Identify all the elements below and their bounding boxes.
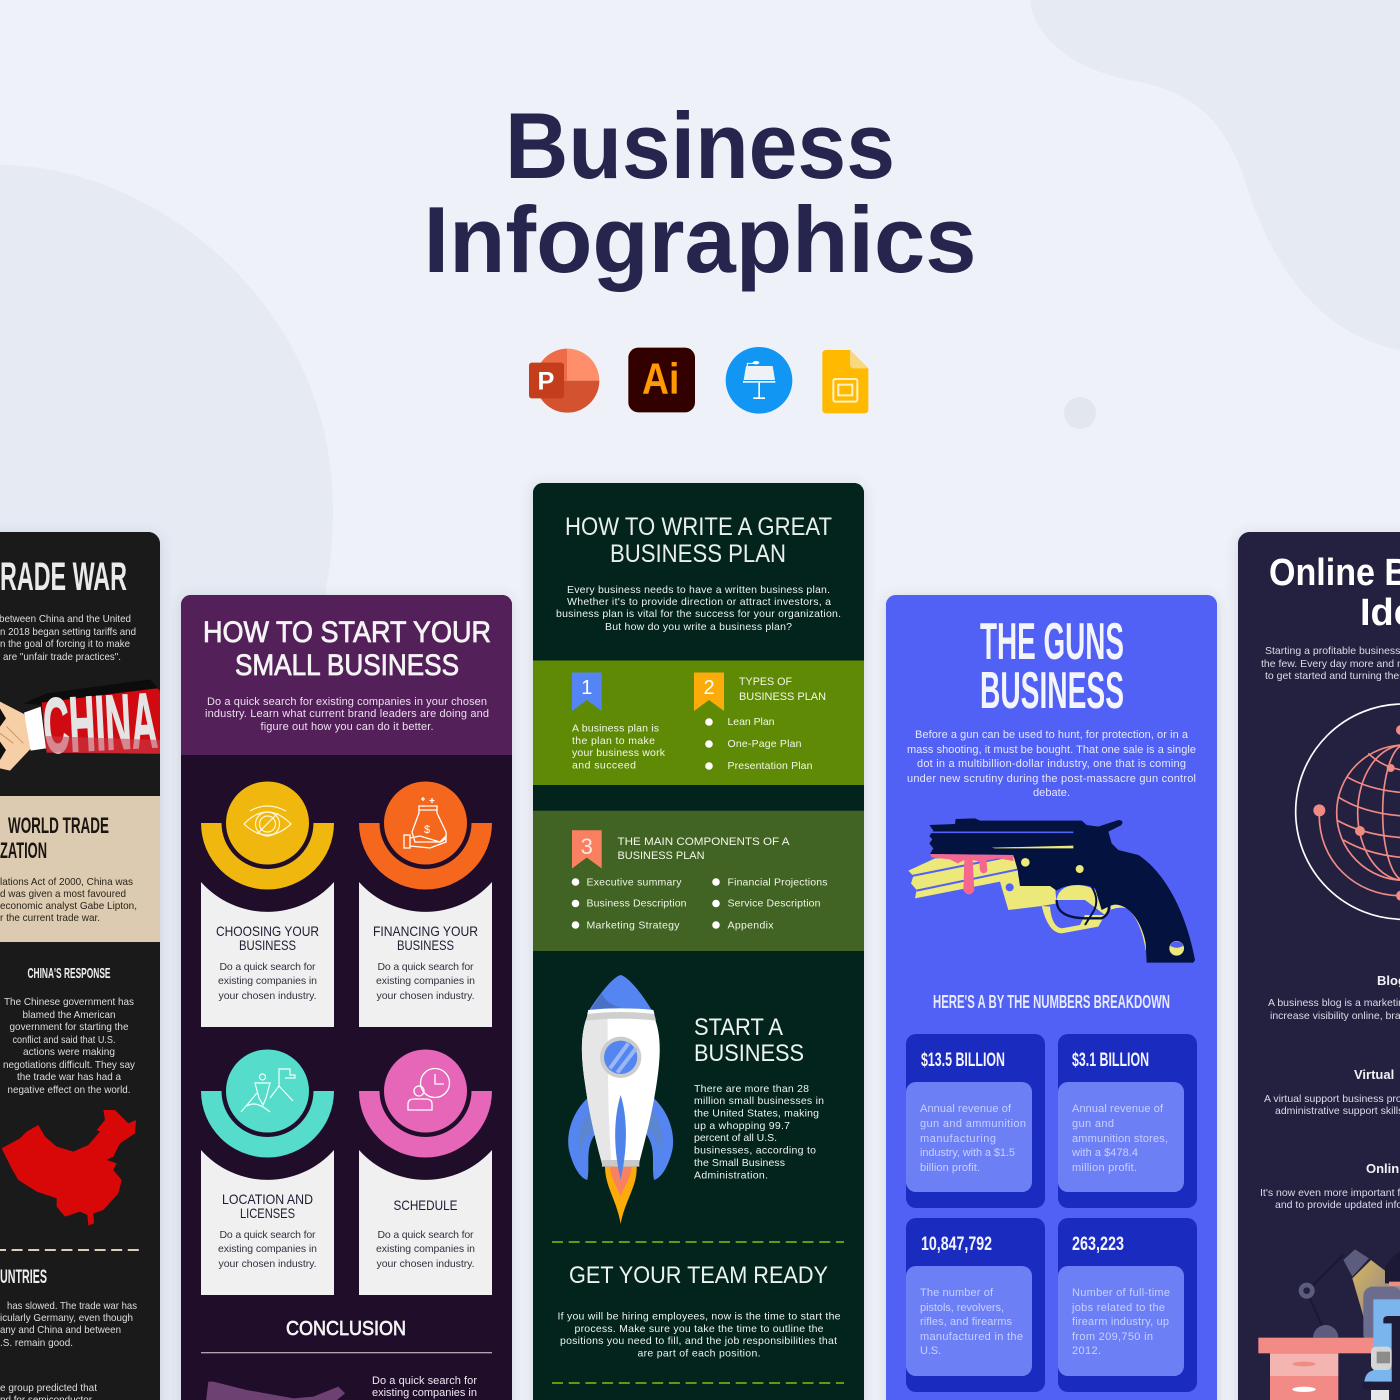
heading: HOW TO WRITE A GREAT [565,513,832,541]
text: start a business: million small businesses in [694,1095,824,1107]
stat: 263,223: firearm industry, up [1072,1316,1169,1328]
text: get your team ready: If you will be hiring employees, now is the time to start the [558,1310,841,1322]
heading: numbers breakdown: HERE'S A BY THE NUMBERS BREAKDOWN [933,992,1170,1012]
panel: world trade organization: d was given a most favoured [0,888,126,900]
card shadows [0,483,1400,1400]
heading [566,517,832,562]
title: Business [505,93,895,198]
text: start a business: the United States, making [694,1108,819,1120]
intro text: Before a gun can be used to hunt, for protection, or in a [915,729,1189,741]
text: get your team ready: process. Make sure you take the time to outline the [574,1323,824,1335]
intro text: mass shooting, it must be bought. That one sale is a single [907,744,1196,756]
text: get your team ready: positions you need to fill, and the job responsibilities that [560,1335,837,1347]
badge 2 [694,672,724,711]
intro text: But how do you write a business plan? [605,621,792,633]
step: schedule: existing companies in [376,1243,475,1255]
heading: start a business: START A [694,1014,783,1041]
step: choosing your business [201,782,334,1027]
panel: world trade organization: WORLD TRADE [8,813,109,838]
text: China's response: negative effect on the world. [8,1084,130,1096]
stat: 10,847,792: The number of [920,1287,994,1299]
illustration: rocket [568,975,673,1224]
icon: PowerPoint: P [538,367,555,395]
stat: 13.5 billion: $13.5 BILLION [921,1050,1005,1071]
panel: steps one and two: Presentation Plan [728,760,813,772]
icon: person and clock [408,1068,450,1110]
heading [1269,552,1400,634]
header band: figure out how you can do it better. [260,721,434,733]
panel: step three [533,811,864,951]
icon: Keynote [726,347,792,414]
header band: SMALL BUSINESS [235,649,459,682]
panel: steps one and two [533,660,864,785]
software icons row [529,347,868,414]
heading: get your team ready: GET YOUR TEAM READY [569,1262,828,1289]
intro text [907,729,1196,799]
header band: Do a quick search for existing companies in your chosen [207,696,487,708]
stat: 3.1 billion: ammunition stores, [1072,1133,1168,1145]
panel: world trade organization: r the current trade war. [0,912,100,924]
stat: 13.5 billion: billion profit. [920,1162,980,1174]
stat: 263,223: from 209,750 in [1072,1331,1153,1343]
panel: steps one and two: One-Page Plan [728,738,802,750]
panel: world trade organization [0,796,160,942]
intro text [0,613,136,663]
heading: China's response: CHINA'S RESPONSE [28,965,110,982]
intro text: Whether it's to provide direction or attract investors, a [567,596,831,608]
title [424,93,976,292]
stat: 263,223: Number of full-time [1072,1287,1170,1299]
intro text [1261,645,1400,682]
text: conclusion: Do a quick search for [372,1375,477,1387]
panel: steps one and two: and succeed [572,760,636,772]
stat: 3.1 billion: with a $478.4 [1071,1147,1138,1159]
section: virtual support: administrative support skills [1275,1105,1400,1117]
panel: online business ideas [1238,532,1400,1400]
text: countries: has slowed. The trade war has [7,1300,137,1312]
step: financing your business: FINANCING YOUR [373,923,478,939]
icon: Illustrator: Ai [642,354,679,403]
step: financing your business: Do a quick search for [378,961,474,973]
map: United States [205,1382,345,1400]
text: conclusion [372,1375,477,1399]
panel: step three: THE MAIN COMPONENTS OF A [618,836,790,848]
panel: step three: Service Description [728,898,821,910]
step: choosing your business: Do a quick search for [220,961,316,973]
text: China's response: actions were making [23,1046,115,1058]
stat: 10,847,792: U.S. [920,1345,941,1357]
icon: money bag in hand [404,797,446,848]
text: China's response: negotiations difficult. They say [3,1059,136,1071]
intro text: between China and the United [0,613,131,625]
text: start a business: businesses, according to [694,1144,816,1156]
section: online [1260,1161,1400,1211]
step: schedule: your chosen industry. [376,1258,474,1270]
intro text: Every business needs to have a written business plan. [567,584,830,596]
panel: step three: Appendix [728,920,774,932]
intro text: dot in a multibillion-dollar industry, one that is coming [917,758,1186,770]
step: financing your business [359,782,492,1027]
intro text: under new scrutiny during the post-massacre gun control [907,773,1196,785]
step: location and licenses: LICENSES [240,1205,295,1221]
text: conclusion: existing companies in [372,1387,477,1399]
text: start a business: the Small Business [694,1157,785,1169]
panel: steps one and two: TYPES OF [739,676,792,688]
badge 3 [572,830,602,868]
section: virtual support [1264,1067,1400,1117]
icon: summit with flag [241,1069,295,1112]
header band: industry. Learn what current brand leaders are doing and [205,708,489,720]
stat: 3.1 billion: gun and [1072,1118,1114,1130]
heading [980,622,1123,708]
panel: step three: Marketing Strategy [586,920,680,932]
step: choosing your business: existing companies in [218,975,317,987]
section: blog [1268,973,1400,1022]
icon: PowerPoint [529,349,599,413]
heading: THE GUNS [980,613,1124,671]
panel: steps one and two: the plan to make [572,735,655,747]
text: China's response: the trade war has had a [17,1071,121,1083]
step: financing your business: existing companies in [376,975,475,987]
panel: step three: Financial Projections [728,876,828,888]
illustration: handshake and China sleeve [0,676,160,771]
heading: BUSINESS [980,662,1124,720]
stat: 10,847,792: rifles, and firearms [920,1316,1012,1328]
heading: start a business: BUSINESS [694,1040,804,1067]
step: location and licenses: your chosen industry. [218,1258,316,1270]
stat: 263,223 [1058,1218,1197,1392]
text: countries: any and China and between [0,1324,121,1336]
step: schedule: SCHEDULE [394,1197,458,1213]
intro text [556,584,841,633]
stat: 10,847,792: 10,847,792 [921,1234,992,1255]
heading: BUSINESS PLAN [610,540,786,568]
stat: 13.5 billion: industry, with a $1.5 [920,1147,1015,1159]
icon: money bag in hand: $ [424,824,430,836]
step: choosing your business: BUSINESS [239,937,296,953]
panel: step three: BUSINESS PLAN [618,850,704,862]
heading: conclusion: CONCLUSION [286,1318,406,1340]
heading: start a business [695,1018,803,1061]
intro text: are "unfair trade practices". [3,651,121,663]
badge 2: 2 [703,677,715,699]
step: financing your business: your chosen industry. [376,990,474,1002]
title: Infographics [424,187,976,292]
illustration: globe [1296,704,1400,919]
intro text: debate. [1033,787,1070,799]
stat: 3.1 billion: million profit. [1072,1162,1137,1174]
stat: 13.5 billion: manufacturing [920,1133,996,1145]
header band: HOW TO START YOUR [203,616,491,649]
heading: countries: UNTRIES [0,1267,47,1288]
text: countries: .S. remain good. [0,1337,73,1349]
illustration: revolver [908,818,1195,963]
step: schedule: Do a quick search for [378,1229,474,1241]
map: China [2,1110,136,1226]
intro text: n the goal of forcing it to make [0,638,130,650]
step: choosing your business: CHOOSING YOUR [216,923,319,939]
panel: world trade organization: economic analyst Gabe Lipton, [0,900,137,912]
panel: how to start your small business [181,595,512,1400]
panel: step three: Executive summary [586,876,682,888]
badge 1: 1 [581,677,592,699]
stat: 13.5 billion: Annual revenue of [920,1103,1012,1115]
text: countries: e group predicted that [0,1382,97,1394]
step: financing your business: BUSINESS [397,937,454,953]
stat: 13.5 billion [906,1034,1045,1208]
text: start a business: percent of all U.S. [694,1132,777,1144]
heading: trade war: RADE WAR [0,555,127,599]
text: start a business: up a whopping 99.7 [694,1120,790,1132]
text: countries [0,1300,137,1400]
header band [181,595,512,755]
text: China's response [3,996,136,1096]
section: online: Onlin [1366,1161,1399,1176]
intro text: business plan is vital for the success for your organization. [556,608,841,620]
stat: 3.1 billion: $3.1 BILLION [1072,1050,1149,1071]
panel: steps one and two: A business plan is [572,722,659,734]
text: start a business [694,1083,824,1182]
panel: world trade organization: lations Act of 2000, China was [0,876,133,888]
panel: how to write a great business plan [533,483,864,1400]
step: location and licenses: LOCATION AND [222,1191,313,1207]
stat: 263,223: jobs related to the [1071,1302,1165,1314]
stat: 13.5 billion: gun and ammunition [920,1118,1026,1130]
text: China's response: conflict and said that U.S. [12,1034,116,1046]
panel: steps one and two: your business work [572,747,666,759]
badge 1 [572,672,602,711]
step: choosing your business: your chosen industry. [218,990,316,1002]
text: China's response: The Chinese government has [4,996,134,1008]
panel: steps one and two: Lean Plan [728,716,775,728]
stat: 3.1 billion [1058,1034,1197,1208]
step: schedule [359,1050,492,1295]
text: countries: icularly Germany, even though [0,1312,133,1324]
stat: 263,223: 2012. [1072,1345,1101,1357]
text: China's response: blamed the American [22,1009,116,1021]
panel: world trade organization: ZATION [0,838,47,863]
text: CHINA [41,676,159,770]
icon: Google Slides [822,350,868,413]
icon: Illustrator [628,348,695,412]
panel: trade war card [0,532,160,1400]
panel: the guns business [886,595,1217,1400]
section: virtual support: Virtual [1354,1067,1394,1082]
step: location and licenses: Do a quick search for [220,1229,316,1241]
stat: 10,847,792: pistols, revolvers, [920,1302,1004,1314]
stat: 263,223: 263,223 [1072,1234,1124,1255]
stat: 10,847,792: manufactured in the [920,1331,1023,1343]
illustration: desk with lamp [1258,1249,1400,1400]
text: start a business: There are more than 28 [694,1083,809,1095]
text: get your team ready: are part of each position. [638,1348,760,1360]
text: start a business: Administration. [694,1170,768,1182]
text: China's response: government for starting the [10,1021,129,1033]
panel: step three: Business Description [586,898,687,910]
text: get your team ready [558,1310,841,1360]
stat: 10,847,792 [906,1218,1045,1392]
panel: steps one and two: BUSINESS PLAN [739,691,826,703]
icon: eye [244,806,291,836]
step: location and licenses: existing companies in [218,1243,317,1255]
step: location and licenses [201,1050,334,1295]
stat: 3.1 billion: Annual revenue of [1072,1103,1164,1115]
intro text: n 2018 began setting tariffs and [0,626,136,638]
badge 3: 3 [581,834,593,859]
